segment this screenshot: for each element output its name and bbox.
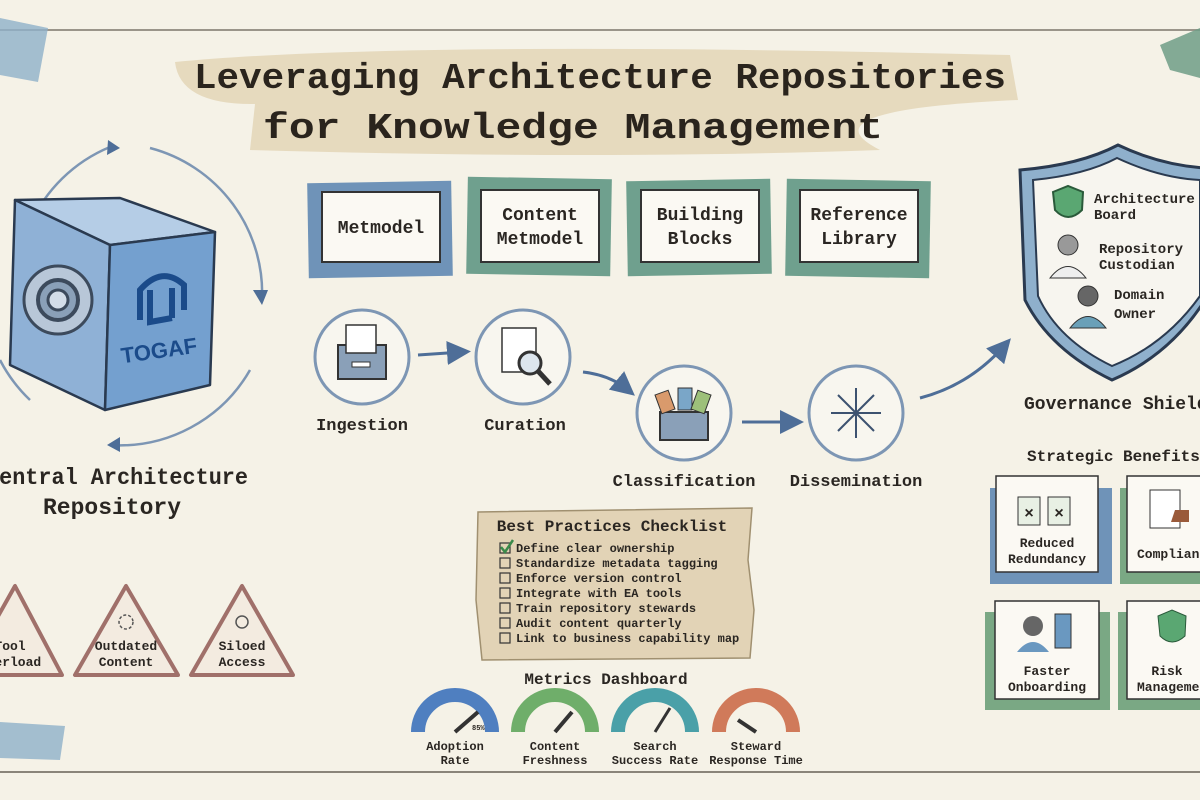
gauge: steward response time — [709, 695, 803, 768]
gauge: search success rate — [612, 695, 698, 768]
box: metmodel: Metmodel — [338, 219, 424, 239]
heading: central architecture repository — [0, 465, 248, 521]
box: building blocks: Building — [657, 206, 743, 226]
process: curation: Curation — [484, 417, 566, 436]
box: metmodel — [307, 181, 453, 278]
warning: outdated content: Outdated — [95, 639, 157, 654]
gauge: steward response time: Steward — [731, 740, 781, 754]
checklist: Define clear ownership — [516, 542, 674, 556]
gauge: steward response time: Response Time — [709, 754, 803, 768]
benefit: faster onboarding: Faster — [1024, 664, 1070, 679]
gauge: adoption rate: Adoption — [426, 740, 484, 754]
box: content metmodel: Metmodel — [497, 230, 583, 250]
benefit: faster onboarding — [985, 601, 1110, 710]
checklist: Best Practices Checklist — [497, 518, 727, 536]
repository cube with cycle arrows — [0, 140, 268, 452]
checklist — [476, 508, 754, 660]
gauge: content freshness — [518, 695, 592, 768]
title: Leveraging Architecture Repositories — [194, 58, 1006, 99]
title — [175, 49, 1018, 155]
gauge: content freshness: Freshness — [523, 754, 587, 768]
gauge: content freshness: Content — [530, 740, 580, 754]
benefit: risk management — [1118, 601, 1200, 710]
process: dissemination: Dissemination — [790, 473, 922, 492]
heading: metrics dashboard: Metrics Dashboard — [524, 671, 688, 689]
box: building blocks — [626, 179, 772, 276]
process: curation — [476, 310, 570, 436]
benefit: compliance — [1120, 476, 1200, 584]
tape: top right — [1160, 28, 1200, 78]
governance shield: Architecture — [1094, 192, 1195, 208]
box: reference library: Library — [821, 230, 897, 250]
box: reference library: Reference — [810, 206, 908, 226]
box: content metmodel: Content — [502, 206, 578, 226]
title: for Knowledge Management — [263, 108, 883, 149]
gauge: search success rate: Search — [633, 740, 677, 754]
process: ingestion: Ingestion — [316, 417, 408, 436]
checklist: Link to business capability map — [516, 632, 739, 646]
governance shield: Owner — [1114, 307, 1156, 323]
gauge: adoption rate: 85% — [472, 725, 485, 733]
checklist: Enforce version control — [516, 572, 682, 586]
gauge: adoption rate — [418, 695, 492, 768]
warning: siloed access: Siloed — [219, 639, 265, 654]
warning: outdated content: Content — [99, 655, 153, 670]
gauge: adoption rate: Rate — [441, 754, 469, 768]
checklist: Audit content quarterly — [516, 617, 682, 631]
warning: outdated content — [75, 586, 178, 675]
benefit: reduced redundancy: × — [1024, 505, 1034, 523]
arrow — [583, 372, 628, 390]
governance shield: Board — [1094, 208, 1136, 224]
benefit: faster onboarding: Onboarding — [1008, 680, 1086, 695]
checklist: Standardize metadata tagging — [516, 557, 718, 571]
box: content metmodel — [466, 177, 612, 276]
checklist: Train repository stewards — [516, 602, 696, 616]
benefit: reduced redundancy: × — [1054, 505, 1064, 523]
arrow — [742, 420, 795, 424]
box: building blocks: Blocks — [668, 230, 732, 250]
warning: tool overload — [0, 586, 62, 675]
process: ingestion — [315, 310, 409, 436]
benefit: reduced redundancy: Reduced — [1020, 536, 1074, 551]
gauge: search success rate: Success Rate — [612, 754, 698, 768]
governance shield: Domain — [1114, 288, 1164, 304]
checklist: Integrate with EA tools — [516, 587, 682, 601]
warning: siloed access — [191, 586, 293, 675]
warning: siloed access: Access — [219, 655, 266, 670]
tape: top left — [0, 18, 48, 82]
arrow to shield — [920, 345, 1005, 398]
arrow — [418, 352, 462, 355]
governance shield: Custodian — [1099, 258, 1175, 274]
process: classification — [613, 366, 755, 492]
repository cube with cycle arrows: TOGAF — [119, 333, 199, 368]
benefit: reduced redundancy: Redundancy — [1008, 552, 1086, 567]
tape: bottom left — [0, 722, 65, 760]
governance shield: Repository — [1099, 242, 1184, 258]
governance shield — [1020, 145, 1200, 380]
benefit: reduced redundancy — [990, 476, 1112, 584]
process: classification: Classification — [613, 473, 755, 492]
process: dissemination — [790, 366, 922, 492]
heading: central architecture repository: Repository — [43, 495, 181, 521]
box: reference library — [785, 179, 931, 278]
heading: strategic benefits: Strategic Benefits — [1027, 448, 1200, 466]
benefit: risk management: Risk — [1151, 664, 1183, 679]
